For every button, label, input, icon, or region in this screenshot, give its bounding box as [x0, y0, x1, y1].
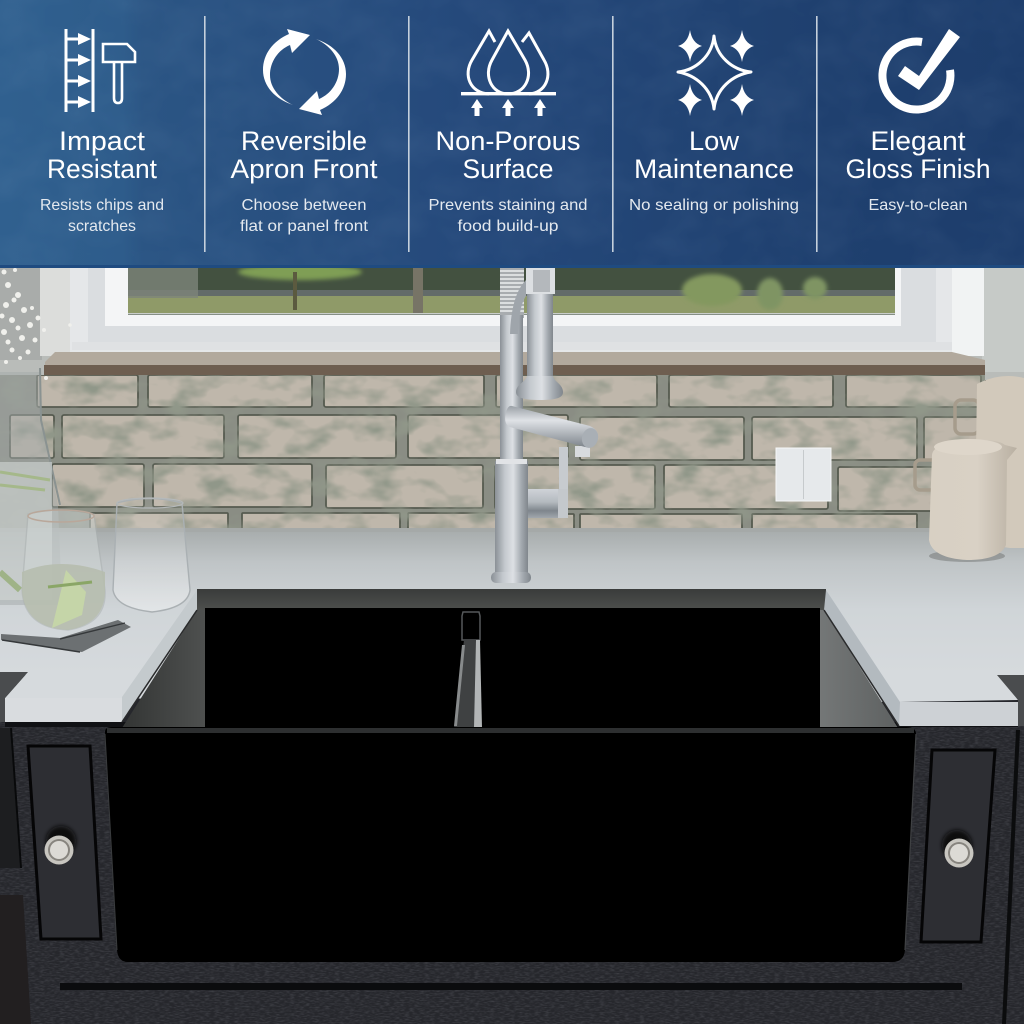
aerator [575, 446, 590, 457]
spray head [516, 268, 563, 400]
light switch [776, 448, 831, 501]
heading: Gloss Finish [846, 154, 990, 184]
window sill [44, 352, 985, 375]
knob right [942, 830, 974, 868]
description: flat or panel front [240, 218, 369, 235]
icon: wall and hammer [66, 29, 135, 112]
toe groove [60, 983, 962, 990]
heading: Impact [59, 126, 146, 156]
drawer panel left [28, 746, 101, 939]
flowers [0, 268, 72, 380]
feature: reversible apron front [230, 29, 378, 235]
vase [0, 368, 62, 605]
brick backsplash [0, 375, 985, 534]
heading: Maintenance [634, 154, 794, 184]
description: Easy-to-clean [868, 197, 968, 214]
heading: Resistant [47, 154, 157, 184]
faucet [491, 268, 600, 583]
knob left [44, 826, 76, 864]
heading: Low [689, 126, 740, 156]
basin interior left [122, 608, 451, 728]
icon: sparkles [678, 30, 754, 116]
heading: Elegant [870, 126, 966, 156]
lever handle [518, 447, 568, 518]
apron front [105, 727, 916, 962]
drawer panel right [921, 750, 995, 942]
icon: check in circle [882, 29, 960, 110]
cabinet [0, 697, 1024, 1024]
sink [105, 589, 916, 962]
heading: Surface [462, 154, 554, 184]
wall and window [0, 260, 1024, 380]
feature banner [0, 0, 1024, 268]
rear jug [955, 376, 1024, 548]
glass with lime [22, 510, 105, 630]
feature: low maintenance [629, 30, 799, 214]
heading: Reversible [241, 126, 367, 156]
counter cut edges [122, 590, 900, 726]
feature: elegant gloss finish [846, 29, 990, 214]
empty glass [113, 498, 190, 612]
faucet base [491, 459, 531, 583]
spring hose [500, 268, 524, 318]
heading: Apron Front [230, 154, 378, 184]
feature: non-porous surface [428, 31, 588, 235]
divider [451, 608, 482, 728]
description: Prevents staining and [428, 197, 588, 214]
feature: impact resistant [40, 29, 164, 235]
napkin [1, 620, 131, 652]
icon: reverse arrows [263, 29, 346, 115]
spout [505, 406, 600, 450]
basin interior right [480, 608, 898, 728]
countertop [0, 528, 1024, 726]
description: scratches [68, 218, 136, 235]
window view [128, 260, 895, 315]
icon: water drops on surface [461, 31, 556, 116]
heading: Non-Porous [436, 126, 580, 156]
description: No sealing or polishing [629, 197, 799, 214]
sink rim [197, 589, 826, 610]
front jug [915, 439, 1017, 562]
description: food build-up [458, 218, 559, 235]
description: Choose between [242, 197, 366, 214]
description: Resists chips and [40, 197, 164, 214]
